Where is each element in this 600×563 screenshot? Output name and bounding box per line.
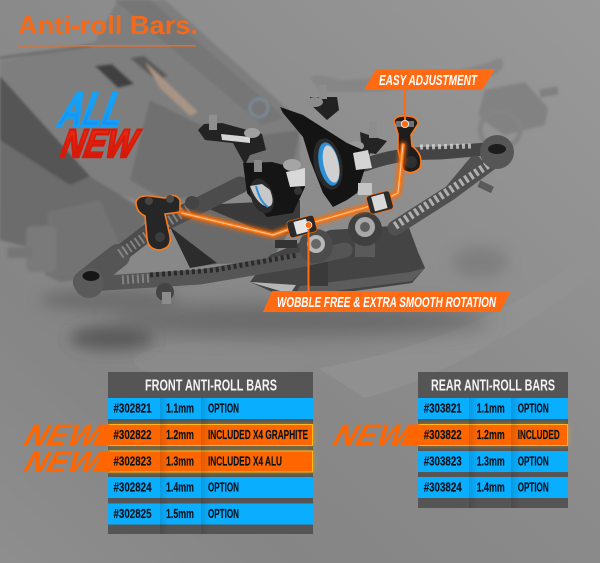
ghosted chassis plate	[0, 0, 300, 262]
pivot posts on lower block	[299, 212, 382, 263]
front row 302822 highlighted: #302822	[114, 428, 152, 442]
front row 302823 highlighted	[100, 451, 313, 472]
front table heading: FRONT ANTI-ROLL BARS	[145, 378, 277, 394]
rear row 303824: 1.4mm	[477, 481, 505, 495]
left upper arm	[198, 115, 266, 165]
front row 302821	[108, 398, 313, 419]
front suspension arm with carbon weave	[74, 135, 514, 304]
rear row 303821: OPTION	[518, 402, 549, 416]
front row 302821: #302821	[114, 402, 152, 416]
front row 302822 highlighted	[100, 424, 313, 446]
title: Anti-roll Bars.	[18, 10, 198, 40]
table: front anti-roll bars	[100, 372, 313, 534]
front row 302824: #302824	[114, 481, 152, 495]
rear row 303824	[418, 477, 568, 498]
ghosted left wheel hub	[7, 200, 122, 282]
shadow under car	[40, 200, 490, 350]
chrome bar joints	[275, 190, 394, 248]
front row 302825: #302825	[114, 507, 152, 521]
right ball link with orange outline	[394, 116, 421, 173]
front row 302823 highlighted: INCLUDED X4 ALU	[208, 455, 282, 469]
rear row 303821: #303821	[424, 402, 462, 416]
left ball link with orange outline	[136, 195, 199, 250]
rear row 303821	[418, 398, 568, 419]
rear row 303822 highlighted	[408, 424, 568, 446]
front row 302825: 1.5mm	[166, 507, 194, 521]
rear row 303823: OPTION	[518, 455, 549, 469]
front row 302824: 1.4mm	[166, 481, 194, 495]
table: rear anti-roll bars	[408, 372, 568, 508]
rear row 303824: #303824	[424, 481, 462, 495]
ghosted right wheel hub	[310, 58, 559, 148]
front row 302825: OPTION	[208, 507, 239, 521]
rear row 303822 highlighted: #303822	[424, 428, 462, 442]
rear row 303824: OPTION	[518, 481, 549, 495]
new flag: row 303822: NEW	[326, 418, 418, 452]
front row 302821: OPTION	[208, 402, 239, 416]
new flag: row 302823: NEW	[17, 444, 109, 478]
badge word: all: ALL	[52, 83, 133, 137]
front row 302824: OPTION	[208, 481, 239, 495]
front row 302824	[108, 477, 313, 498]
rear row 303822 highlighted: 1.2mm	[477, 428, 505, 442]
front row 302822 highlighted: 1.2mm	[166, 428, 194, 442]
new flag: row 302822: NEW	[17, 418, 109, 452]
rear row 303823: #303823	[424, 455, 462, 469]
front row 302823 highlighted: 1.3mm	[166, 455, 194, 469]
callout: easy adjustment: EASY ADJUSTMENT	[379, 72, 478, 89]
rear upright with blue bearing	[280, 107, 372, 207]
front upright with blue bearing	[243, 159, 305, 217]
rear row 303823	[418, 451, 568, 472]
rear row 303823: 1.3mm	[477, 455, 505, 469]
badge word: new: NEW	[55, 122, 145, 166]
badge: all new	[52, 83, 145, 166]
callout: wobble free: WOBBLE FREE & EXTRA SMOOTH ROTATION	[277, 294, 497, 311]
top bolt arm	[307, 85, 339, 120]
orange anti-roll bar	[182, 145, 403, 235]
rear row 303822 highlighted: INCLUDED	[518, 428, 560, 442]
callout: wobble free	[263, 222, 511, 312]
lower chassis block	[250, 225, 425, 300]
right bolt arm	[348, 121, 387, 154]
front row 302821: 1.1mm	[166, 402, 194, 416]
rear row 303821: 1.1mm	[477, 402, 505, 416]
front row 302823 highlighted: #302823	[114, 455, 152, 469]
front row 302825	[108, 504, 313, 524]
front row 302822 highlighted: INCLUDED X4 GRAPHITE	[208, 428, 308, 442]
callout: easy adjustment	[364, 69, 495, 128]
